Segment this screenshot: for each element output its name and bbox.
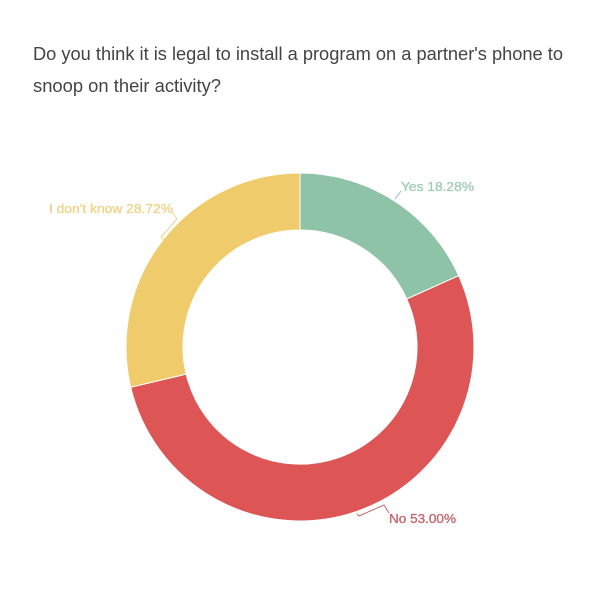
title xyxy=(33,43,563,96)
donut chart xyxy=(126,173,474,521)
segment: No xyxy=(131,276,474,521)
segment: I don't know xyxy=(126,173,300,387)
label: No: No 53.00% xyxy=(389,512,456,526)
label: I don't know: I don't know 28.72% xyxy=(49,202,173,216)
label: No xyxy=(357,505,456,526)
title: snoop on their activity? xyxy=(33,75,221,96)
label: Yes xyxy=(395,180,474,199)
title: Do you think it is legal to install a program on a partner's phone to xyxy=(33,43,563,64)
label: Yes: Yes 18.28% xyxy=(401,180,474,194)
segment: Yes xyxy=(300,173,459,299)
label: I don't know xyxy=(49,202,177,240)
